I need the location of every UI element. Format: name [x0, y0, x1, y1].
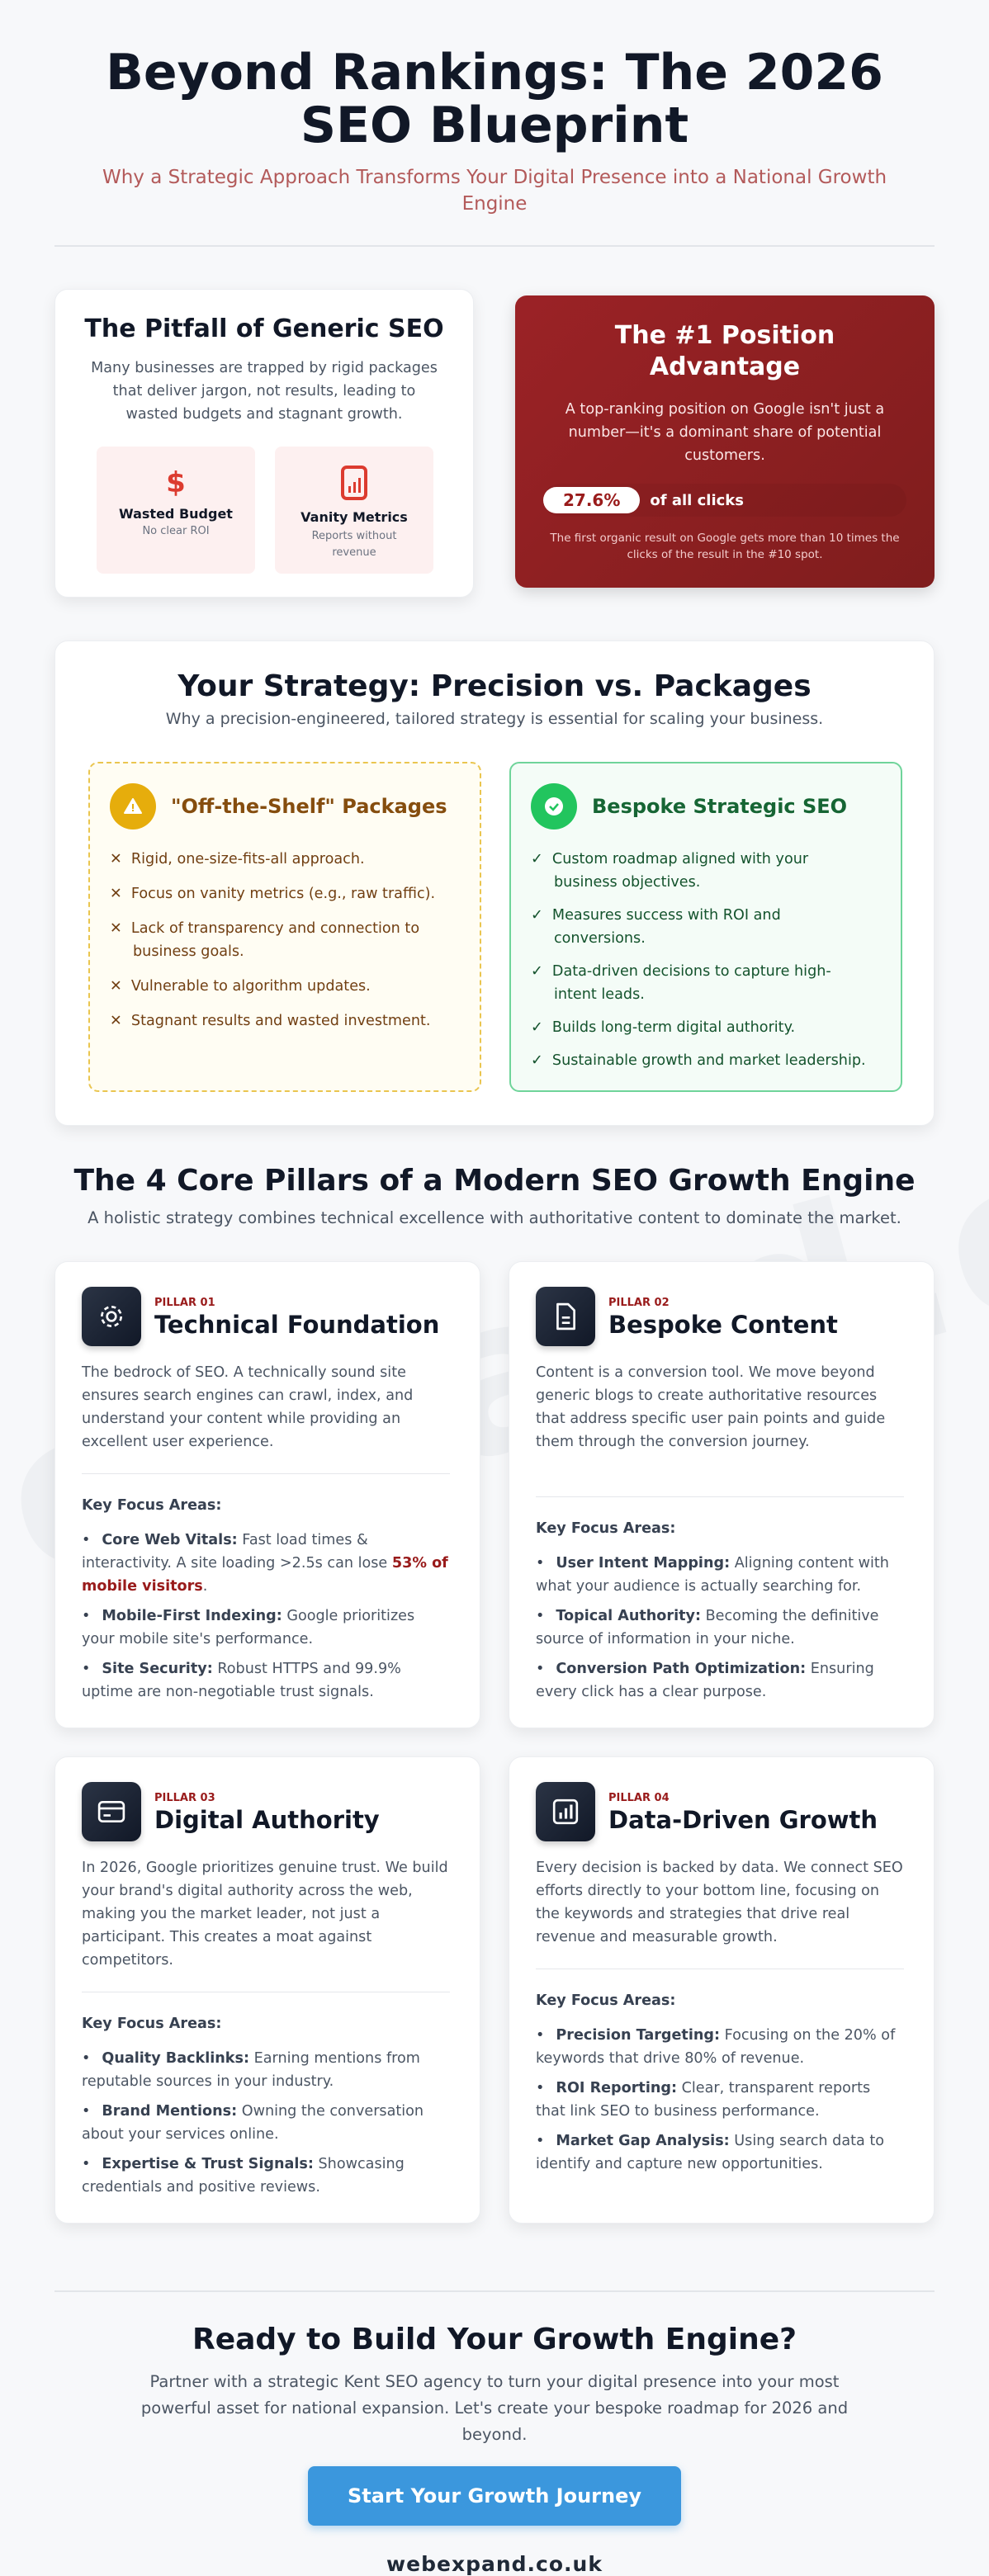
- pillar 01: Mobile-First Indexing: Google prioritizes your mobile site's performance.: [82, 1608, 414, 1647]
- box: bespoke strategic SEO: [509, 762, 902, 1092]
- pillar 01: Key Focus Areas:: [82, 1497, 221, 1514]
- pillar 01: Technical Foundation: [154, 1311, 439, 1339]
- tile: wasted budget: No clear ROI: [142, 525, 210, 537]
- pillar 03: In 2026, Google prioritizes genuine trust. We build your brand's digital authority across the web, making you the market leader, not just a participant. This creates a moat against competitors.: [82, 1860, 448, 1969]
- pillar 04: [509, 1756, 935, 2224]
- icon: dollar: $: [166, 466, 186, 499]
- pillar 01: The bedrock of SEO. A technically sound site ensures search engines can crawl, index, and understand your content while providing an excellent user experience.: [82, 1364, 413, 1450]
- icon: report chart: [341, 466, 367, 500]
- panel: pitfall of generic SEO: [54, 289, 474, 598]
- CTA heading: Ready to Build Your Growth Engine?: [192, 2323, 797, 2356]
- icon: check: [531, 783, 577, 830]
- tile: vanity metrics: [275, 447, 433, 574]
- box: bespoke strategic SEO: ✓ Sustainable growth and market leadership.: [531, 1052, 866, 1069]
- heading: Your Strategy: Precision vs. Packages: [177, 669, 812, 703]
- pillar 03: Expertise & Trust Signals: Showcasing credentials and positive reviews.: [82, 2156, 405, 2196]
- pillar 04: Every decision is backed by data. We connect SEO efforts directly to your bottom line, focusing on the keywords and strategies that drive real revenue and measurable growth.: [536, 1860, 903, 1945]
- icon: gear: [82, 1287, 141, 1346]
- pillar 03: Brand Mentions: Owning the conversation about your services online.: [82, 2103, 424, 2143]
- icon: card: [82, 1782, 141, 1841]
- pillar 01: Site Security: Robust HTTPS and 99.9% uptime are non-negotiable trust signals.: [82, 1661, 401, 1700]
- box: bespoke strategic SEO: ✓ Data-driven decisions to capture high-intent leads.: [531, 963, 831, 1003]
- icon: warning: [110, 783, 156, 830]
- box: bespoke strategic SEO: Bespoke Strategic SEO: [592, 795, 847, 818]
- heading: The Pitfall of Generic SEO: [84, 314, 444, 343]
- pillar 02: Topical Authority: Becoming the definitive source of information in your niche.: [536, 1608, 878, 1647]
- pillar 01: [54, 1261, 480, 1728]
- title: [106, 44, 883, 154]
- box: off-the-shelf: ✕ Rigid, one-size-fits-all approach.: [110, 851, 365, 867]
- box: bespoke strategic SEO: ✓ Measures success with ROI and conversions.: [531, 907, 781, 947]
- icon: bar chart: [536, 1782, 595, 1841]
- subtitle: Why a Strategic Approach Transforms Your Digital Presence into a National Growth Engine: [102, 167, 887, 215]
- text block: A top-ranking position on Google isn't just a number—it's a dominant share of potential customers.: [565, 401, 884, 464]
- tile: vanity metrics: Vanity Metrics: [300, 509, 408, 525]
- box: off-the-shelf: ✕ Stagnant results and wasted investment.: [110, 1013, 431, 1029]
- CTA button: Start Your Growth Journey: [348, 2484, 641, 2507]
- box: off-the-shelf: "Off-the-Shelf" Packages: [171, 795, 447, 818]
- tile: wasted budget: [97, 447, 255, 574]
- text block: Many businesses are trapped by rigid packages that deliver jargon, not results, leading to wasted budgets and stagnant growth.: [91, 360, 438, 423]
- tile: wasted budget: Wasted Budget: [119, 506, 233, 522]
- box: bespoke strategic SEO: ✓ Custom roadmap aligned with your business objectives.: [531, 851, 808, 891]
- pillar 04: Data-Driven Growth: [608, 1806, 878, 1834]
- pillar 02: [509, 1261, 935, 1728]
- pillar 03: Quality Backlinks: Earning mentions from reputable sources in your industry.: [82, 2050, 420, 2090]
- title: Beyond Rankings: The 2026: [106, 44, 883, 102]
- pillar 04: ROI Reporting: Clear, transparent reports that link SEO to business performance.: [536, 2080, 870, 2120]
- panel: strategy comparison: [54, 640, 935, 1126]
- pillar 04: Market Gap Analysis: Using search data to identify and capture new opportunities.: [536, 2133, 884, 2172]
- heading: [614, 321, 835, 381]
- panel: #1 position advantage: [515, 295, 935, 588]
- heading: Advantage: [650, 352, 800, 381]
- footer brand: webexpand.co.uk: [386, 2552, 603, 2576]
- pillar 04: Precision Targeting: Focusing on the 20% of keywords that drive 80% of revenue.: [536, 2027, 895, 2067]
- pillar 03: [54, 1756, 480, 2224]
- box: off-the-shelf: [88, 762, 481, 1092]
- pillar 04: PILLAR 04: [608, 1792, 670, 1804]
- footnote: The first organic result on Google gets more than 10 times the clicks of the result in the #10 spot.: [550, 532, 900, 561]
- pillar 02: User Intent Mapping: Aligning content with what your audience is actually searching for.: [536, 1555, 889, 1595]
- box: off-the-shelf: ✕ Focus on vanity metrics (e.g., raw traffic).: [110, 886, 435, 902]
- CTA text: Partner with a strategic Kent SEO agency to turn your digital presence into your most powerful asset for national expansion. Let's create your bespoke roadmap for 2026 and beyond.: [141, 2372, 848, 2444]
- pillar 03: PILLAR 03: [154, 1792, 215, 1804]
- pillar 02: Key Focus Areas:: [536, 1520, 675, 1537]
- tile: vanity metrics: revenue: [332, 546, 376, 559]
- stat: 27.6%: of all clicks: [650, 492, 744, 508]
- subheading: A holistic strategy combines technical excellence with authoritative content to dominate the market.: [88, 1208, 901, 1227]
- title: SEO Blueprint: [300, 97, 689, 154]
- pillar 01: Core Web Vitals: Fast load times & interactivity. A site loading >2.5s can lose 53% of mobile visitors.: [82, 1532, 448, 1595]
- pillar 03: Key Focus Areas:: [82, 2016, 221, 2032]
- heading: 4 core pillars: The 4 Core Pillars of a Modern SEO Growth Engine: [73, 1164, 916, 1198]
- box: bespoke strategic SEO: ✓ Builds long-term digital authority.: [531, 1019, 795, 1036]
- CTA button: [308, 2466, 681, 2526]
- heading: The #1 Position: [615, 321, 835, 350]
- pillar 02: Content is a conversion tool. We move beyond generic blogs to create authoritative resources that address specific user pain points and guide them through the conversion journey.: [536, 1364, 885, 1450]
- icon: document: [536, 1287, 595, 1346]
- pillar 02: PILLAR 02: [608, 1297, 670, 1309]
- pillar 04: Key Focus Areas:: [536, 1992, 675, 2009]
- pillar 03: Digital Authority: [154, 1806, 380, 1834]
- box: off-the-shelf: ✕ Vulnerable to algorithm updates.: [110, 978, 371, 995]
- stat: 27.6%: 27.6%: [563, 490, 620, 510]
- stat: 27.6%: [543, 484, 906, 517]
- pillar 01: PILLAR 01: [154, 1297, 215, 1309]
- pillar 02: Bespoke Content: [608, 1311, 838, 1339]
- subheading: Why a precision-engineered, tailored strategy is essential for scaling your business.: [166, 710, 823, 728]
- tile: vanity metrics: Reports without: [312, 530, 396, 542]
- box: off-the-shelf: ✕ Lack of transparency and connection to business goals.: [110, 920, 419, 960]
- pillar 02: Conversion Path Optimization: Ensuring every click has a clear purpose.: [536, 1661, 874, 1700]
